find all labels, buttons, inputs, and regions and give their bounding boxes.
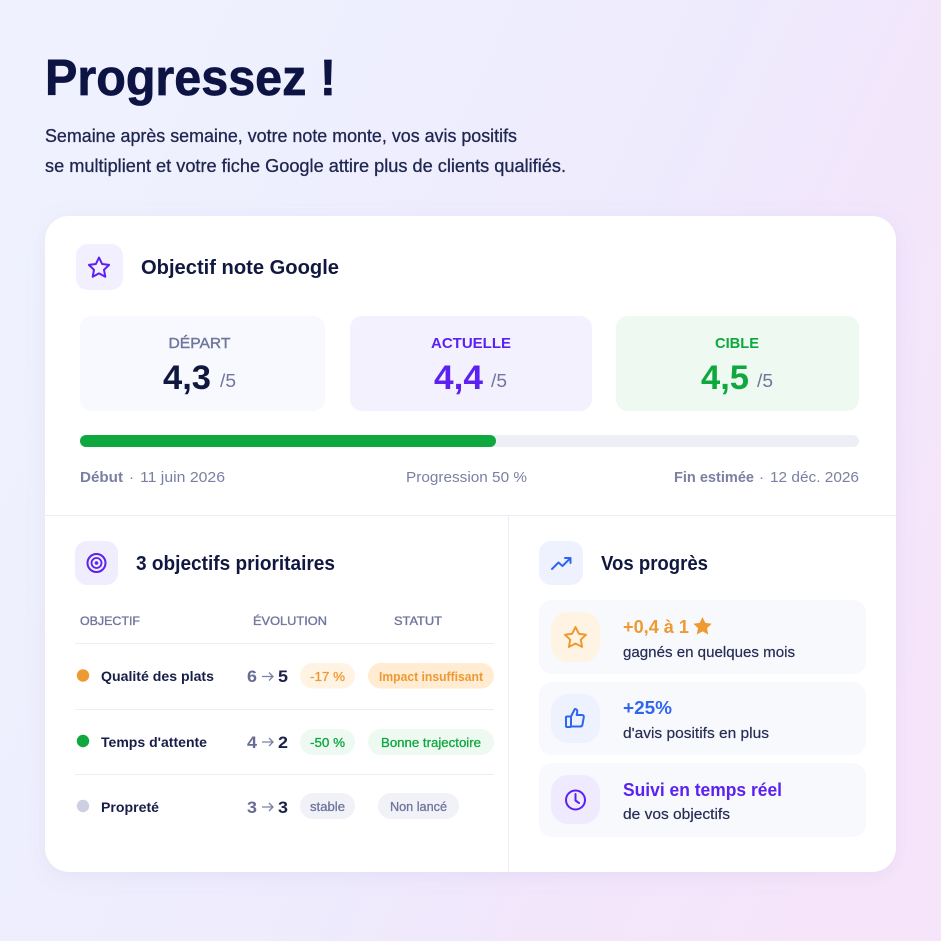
progress labels xyxy=(80,469,859,486)
row: propreté: 3 xyxy=(278,798,288,817)
row: propreté: stable xyxy=(310,799,345,814)
row: temps d'attente: Bonne trajectoire xyxy=(381,735,481,750)
stat: départ: /5 xyxy=(220,371,236,391)
card: avis xyxy=(539,682,866,755)
icon: star xyxy=(76,244,123,290)
row: propreté: Non lancé xyxy=(390,799,447,814)
icon: trend arrow xyxy=(539,541,583,585)
row: qualité des plats: -17 % xyxy=(310,669,345,684)
title: Progressez ! xyxy=(45,49,336,106)
table header: ÉVOLUTION xyxy=(253,613,327,628)
heading: 3 objectifs prioritaires xyxy=(136,553,335,575)
row: propreté: 3 xyxy=(247,798,257,817)
stat: départ: DÉPART xyxy=(168,335,230,352)
card: suivi xyxy=(539,763,866,837)
heading: Objectif note Google xyxy=(141,257,339,279)
heading: Vos progrès xyxy=(601,553,708,575)
subtitle: se multiplient et votre fiche Google attire plus de clients qualifiés. xyxy=(45,156,566,176)
icon: target xyxy=(75,541,118,585)
progress labels: · xyxy=(129,469,134,486)
panel: main card xyxy=(45,216,896,872)
row: propreté: Propreté xyxy=(101,799,159,815)
row: qualité des plats xyxy=(77,663,494,688)
panel: objectif note Google xyxy=(76,244,859,486)
row: qualité des plats: Qualité des plats xyxy=(101,668,214,684)
card: avis: +25% xyxy=(623,698,672,718)
row: temps d'attente xyxy=(77,729,494,755)
table header: STATUT xyxy=(394,614,443,628)
card: avis: d'avis positifs en plus xyxy=(623,725,769,742)
table header: OBJECTIF xyxy=(80,614,140,628)
progress bar xyxy=(80,435,859,447)
stat: cible: CIBLE xyxy=(715,335,759,352)
stat: actuelle: ACTUELLE xyxy=(431,335,511,352)
row: qualité des plats: 5 xyxy=(278,667,288,686)
stat: actuelle xyxy=(350,316,592,411)
progress labels: Fin estimée xyxy=(674,469,754,486)
row: qualité des plats: Impact insuffisant xyxy=(379,669,484,684)
progress labels: Début xyxy=(80,469,123,486)
card: note: +0,4 à 1 xyxy=(623,617,689,637)
stat: départ: 4,3 xyxy=(163,359,211,397)
stat: cible: /5 xyxy=(757,371,773,391)
progress labels: 11 juin 2026 xyxy=(140,469,225,486)
stat: actuelle: /5 xyxy=(491,371,507,391)
row: qualité des plats: 6 xyxy=(247,667,257,686)
row: temps d'attente: -50 % xyxy=(310,735,345,750)
card: suivi: Suivi en temps réel xyxy=(623,780,782,800)
stat: cible: 4,5 xyxy=(701,359,749,397)
stat: actuelle: 4,4 xyxy=(434,359,483,397)
stat: cible xyxy=(616,316,859,411)
panel: vos progrès xyxy=(539,541,866,837)
table header xyxy=(80,613,443,628)
subtitle: Semaine après semaine, votre note monte, vos avis positifs xyxy=(45,126,517,146)
progress labels: Progression 50 % xyxy=(406,469,527,486)
row: temps d'attente: 2 xyxy=(278,733,288,752)
row: propreté xyxy=(77,793,459,819)
row: temps d'attente: 4 xyxy=(247,733,258,752)
stat: départ xyxy=(80,316,325,411)
card: suivi: de vos objectifs xyxy=(623,806,730,823)
card: note: gagnés en quelques mois xyxy=(623,644,795,661)
progress labels: 12 déc. 2026 xyxy=(770,469,859,486)
progress labels: · xyxy=(759,469,764,486)
card: note xyxy=(539,600,866,674)
row: temps d'attente: Temps d'attente xyxy=(101,734,207,750)
subtitle xyxy=(45,126,566,176)
panel: 3 objectifs prioritaires xyxy=(75,541,494,819)
